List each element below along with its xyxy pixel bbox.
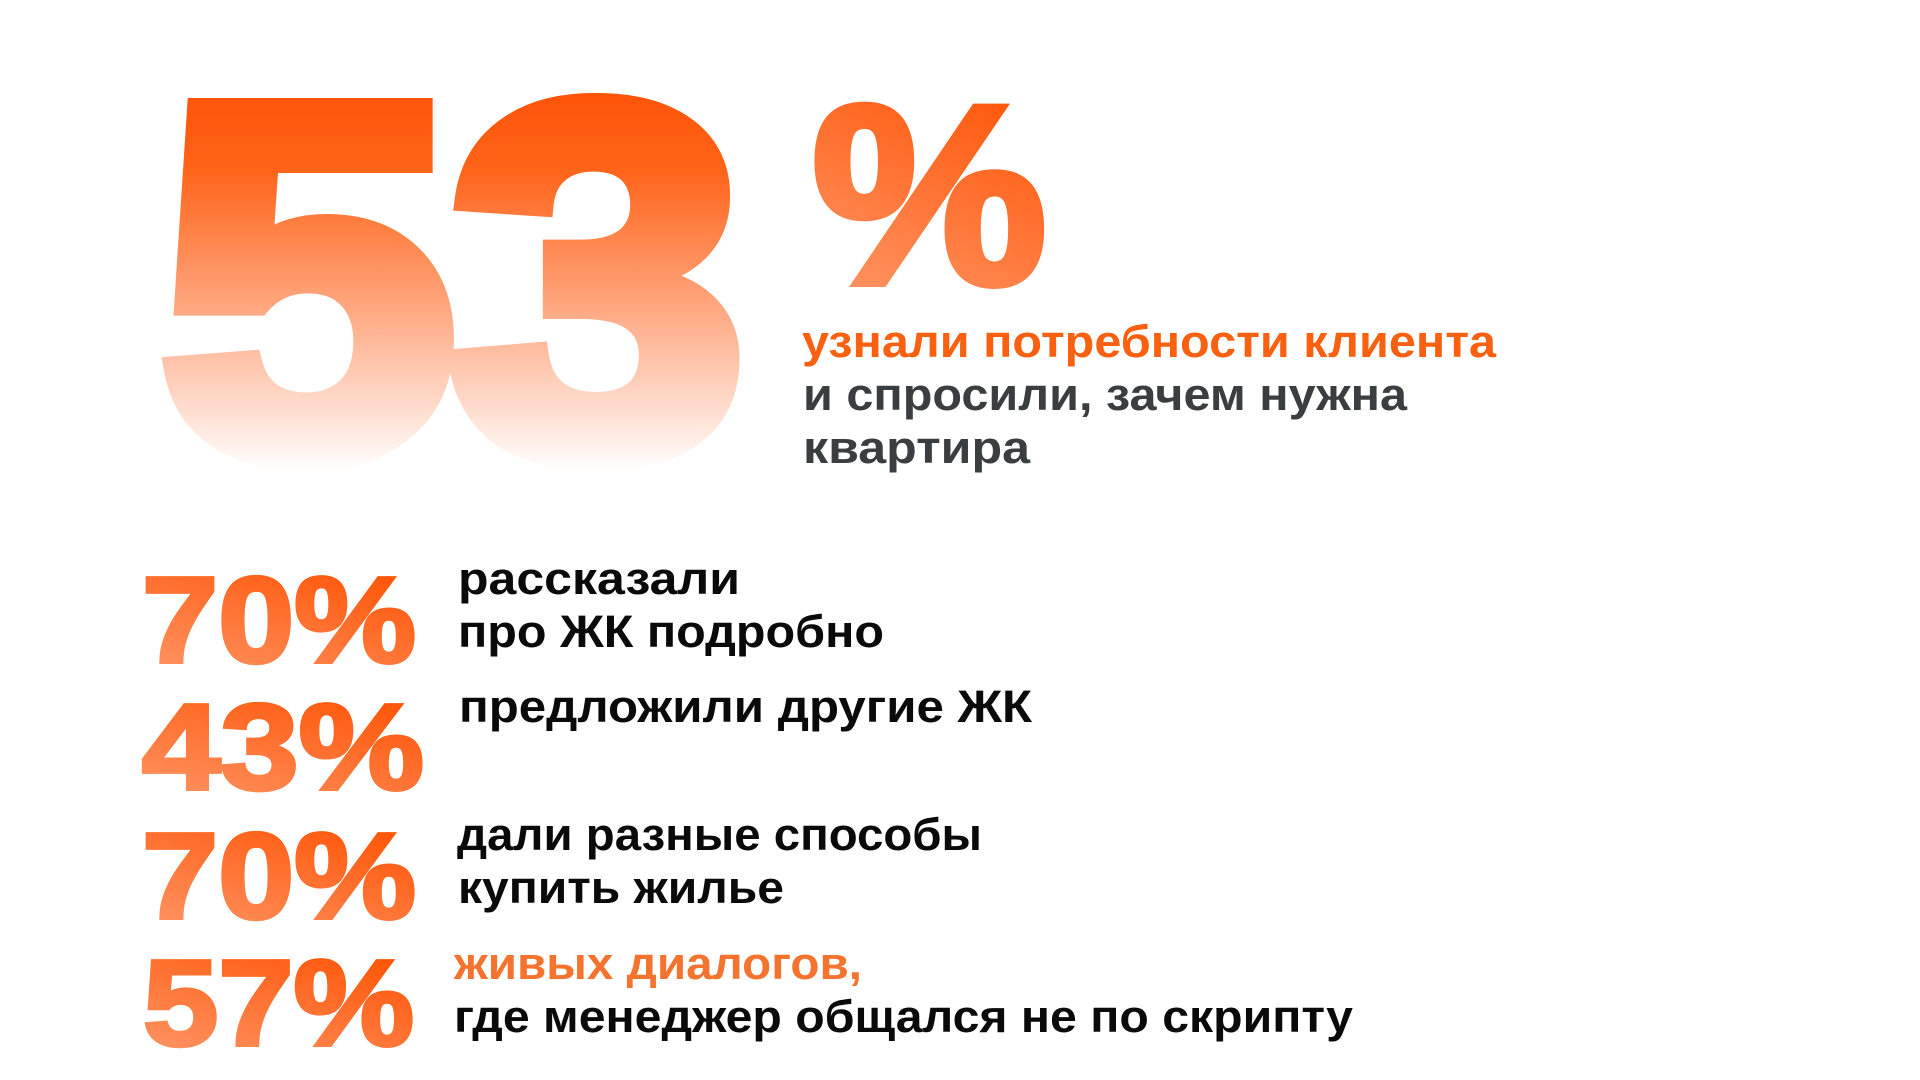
stat: 70% gave different ways to buy: 70%: [142, 808, 416, 944]
stat: 57% live dialogues: где менеджер общался не по скрипту: [454, 991, 1353, 1042]
stat: 70% told about the complex: рассказали: [458, 553, 740, 604]
stat: 43% offered other complexes: [142, 679, 1033, 815]
stat: 57% live dialogues: [143, 935, 1353, 1071]
headline number 53: [160, 1, 746, 560]
headline description: [802, 316, 1497, 473]
headline description: квартира: [803, 422, 1031, 473]
stat: 43% offered other complexes: предложили другие ЖК: [459, 681, 1033, 732]
stat: 70% told about the complex: [142, 552, 884, 688]
stat: 57% live dialogues: живых диалогов,: [453, 938, 862, 989]
large percent sign: %: [812, 53, 1047, 338]
headline description: и спросили, зачем нужна: [803, 369, 1408, 420]
stat: 70% told about the complex: 70%: [142, 552, 416, 688]
stat: 70% gave different ways to buy: [142, 808, 982, 944]
stat: 70% gave different ways to buy: дали разные способы: [457, 809, 982, 860]
stat: 70% told about the complex: про ЖК подробно: [458, 606, 884, 657]
stat: 70% gave different ways to buy: купить жилье: [458, 862, 784, 913]
stat: 43% offered other complexes: 43%: [142, 679, 424, 815]
headline number 53: 5: [160, 1, 456, 560]
stat: 57% live dialogues: 57%: [143, 935, 414, 1071]
headline description: узнали потребности клиента: [802, 316, 1497, 367]
headline number 53: 3: [449, 1, 746, 560]
